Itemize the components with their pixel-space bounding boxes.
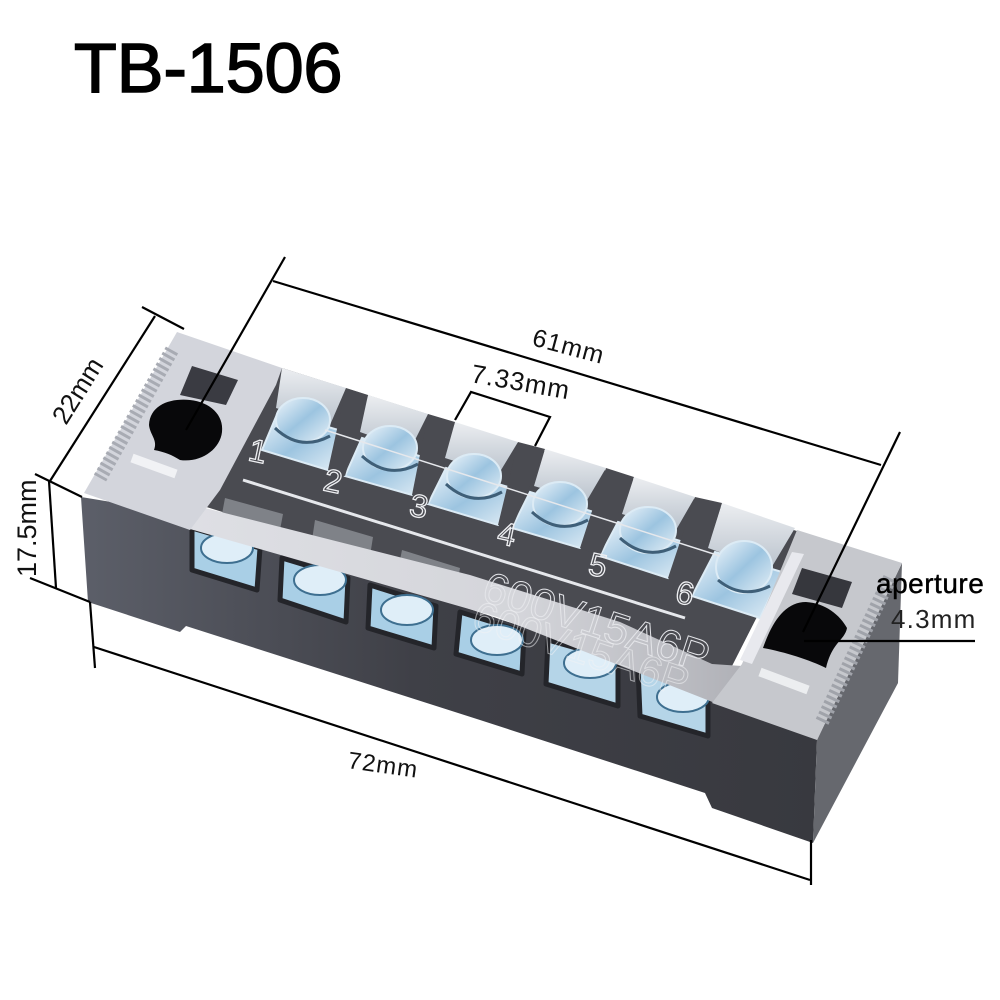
label: 7.33mm: 7.33mm: [469, 358, 573, 405]
right mounting hole: [763, 602, 847, 668]
label: 61mm: 61mm: [529, 324, 608, 370]
title: TB-1506: [74, 29, 342, 107]
right pocket: [792, 568, 852, 608]
right ribs: [760, 672, 808, 690]
moulded lines: [243, 430, 720, 618]
upper terminal screws: [262, 398, 782, 618]
label: 72mm: 72mm: [346, 747, 420, 784]
moulded terminal numbers: 2: [321, 462, 345, 501]
left ribs: [132, 458, 176, 474]
dark interior under clear cover: [200, 368, 800, 670]
front clear band: [190, 506, 742, 703]
moulded terminal numbers: 1: [246, 432, 270, 471]
screw washer arcs: [275, 428, 770, 592]
left cap dotted strip: [100, 350, 172, 478]
faded rating text: 600V15A6P: [467, 592, 695, 706]
label: 22mm: 22mm: [46, 352, 109, 429]
right cover cap: [712, 530, 902, 740]
label: 17.5mm: 17.5mm: [12, 479, 42, 577]
dimension lines: [30, 257, 975, 885]
white rib right: [740, 552, 804, 664]
label: aperture: aperture: [876, 568, 984, 599]
white back tabs: [276, 368, 795, 570]
moulded terminal numbers: 5: [586, 546, 610, 585]
base body front: [81, 497, 817, 843]
moulded rating text: 600V15A6P: [477, 563, 715, 682]
lower screw fragments seen through cover: [222, 498, 460, 586]
right cap dotted strip: [822, 578, 890, 722]
left cover cap: [84, 332, 282, 530]
terminal dividers: [328, 388, 722, 596]
base body right side: [813, 563, 902, 843]
lower metal terminals: [192, 528, 709, 736]
moulded terminal numbers: 3: [407, 487, 431, 526]
left mounting hole: [149, 400, 222, 460]
terminal block product: [81, 332, 902, 843]
label: 4.3mm: 4.3mm: [891, 604, 976, 634]
moulded terminal numbers: [246, 432, 697, 613]
moulded terminal numbers: 4: [495, 515, 519, 554]
left pocket: [180, 366, 238, 405]
moulded terminal numbers: 6: [673, 574, 697, 613]
